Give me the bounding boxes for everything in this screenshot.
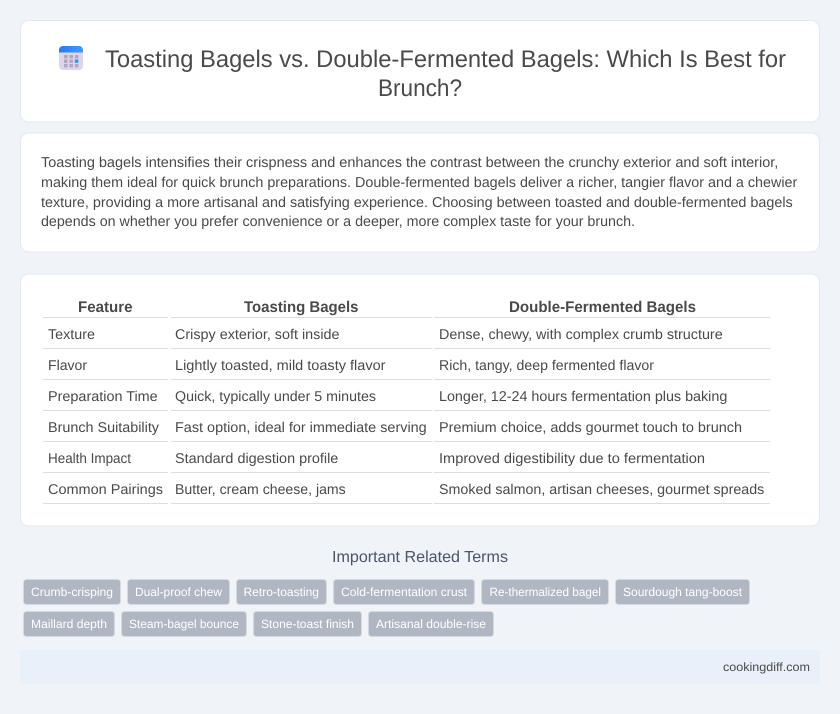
tags: related terms: Steam-bagel bounce — [129, 617, 239, 631]
row: texture — [48, 327, 723, 343]
tags: related terms: Maillard depth — [31, 617, 107, 631]
text block: intro — [41, 155, 797, 230]
tags: related terms: Artisanal double-rise — [376, 617, 486, 631]
row: texture: Dense, chewy, with complex crumb structure — [439, 327, 723, 343]
panel: intro paragraph — [20, 133, 820, 252]
row: health impact: Health Impact — [48, 451, 131, 467]
row: preparation time: Longer, 12-24 hours fermentation plus baking — [439, 389, 727, 405]
footer: cookingdiff.com — [723, 660, 810, 674]
row: preparation time — [48, 389, 727, 405]
panel: title card — [20, 20, 820, 122]
footer — [20, 650, 820, 684]
row: health impact: Standard digestion profile — [175, 451, 338, 467]
table header: Toasting Bagels — [244, 299, 358, 316]
row: brunch suitability: Premium choice, adds gourmet touch to brunch — [439, 420, 742, 436]
table header: Feature — [78, 299, 133, 316]
row: preparation time: Preparation Time — [48, 389, 158, 405]
tags: related terms: Crumb-crisping — [31, 585, 113, 599]
row: brunch suitability — [48, 420, 742, 436]
heading: related terms: Important Related Terms — [332, 549, 508, 566]
row: common pairings: Butter, cream cheese, jams — [175, 482, 346, 498]
row: brunch suitability: Brunch Suitability — [48, 420, 160, 436]
row: texture: Texture — [48, 327, 95, 343]
table header: Double-Fermented Bagels — [509, 299, 696, 316]
tags: related terms: Dual-proof chew — [135, 585, 222, 599]
title — [105, 46, 786, 102]
row: health impact: Improved digestibility due to fermentation — [439, 451, 705, 467]
row: brunch suitability: Fast option, ideal for immediate serving — [175, 420, 427, 436]
tags: related terms: Re-thermalized bagel — [490, 585, 601, 599]
table header — [78, 299, 696, 316]
tags: related terms: Retro-toasting — [244, 585, 319, 599]
row: flavor: Flavor — [48, 358, 87, 374]
tags: related terms: Cold-fermentation crust — [341, 585, 468, 599]
text block: intro: texture, providing a more artisanal and satisfying experience. Choosing between toasted and double-fermented bagels — [41, 195, 793, 211]
row: texture: Crispy exterior, soft inside — [175, 327, 340, 343]
text block: intro: depends on whether you prefer convenience or a deeper, more complex taste for your brunch. — [41, 214, 635, 230]
row: common pairings: Common Pairings — [48, 482, 163, 498]
row: preparation time: Quick, typically under 5 minutes — [175, 389, 376, 405]
row: flavor: Lightly toasted, mild toasty flavor — [175, 358, 386, 374]
text block: intro: making them ideal for quick brunch preparations. Double-fermented bagels deliver a richer, tangier flavor and a chewier — [41, 175, 797, 191]
row: flavor — [48, 358, 654, 374]
title: Brunch? — [378, 75, 462, 102]
row: health impact — [48, 451, 705, 467]
tags: related terms: Sourdough tang-boost — [623, 585, 743, 599]
row: flavor: Rich, tangy, deep fermented flavor — [439, 358, 654, 374]
row: common pairings: Smoked salmon, artisan cheeses, gourmet spreads — [439, 482, 764, 498]
tags: related terms: Stone-toast finish — [261, 617, 354, 631]
title: Toasting Bagels vs. Double-Fermented Bagels: Which Is Best for — [105, 46, 786, 73]
icon: calendar — [59, 46, 83, 70]
tags: related terms — [24, 580, 750, 636]
text block: intro: Toasting bagels intensifies their crispness and enhances the contrast between the crunchy exterior and soft interior, — [41, 155, 778, 171]
panel: comparison table — [20, 274, 820, 526]
row: common pairings — [48, 482, 764, 498]
